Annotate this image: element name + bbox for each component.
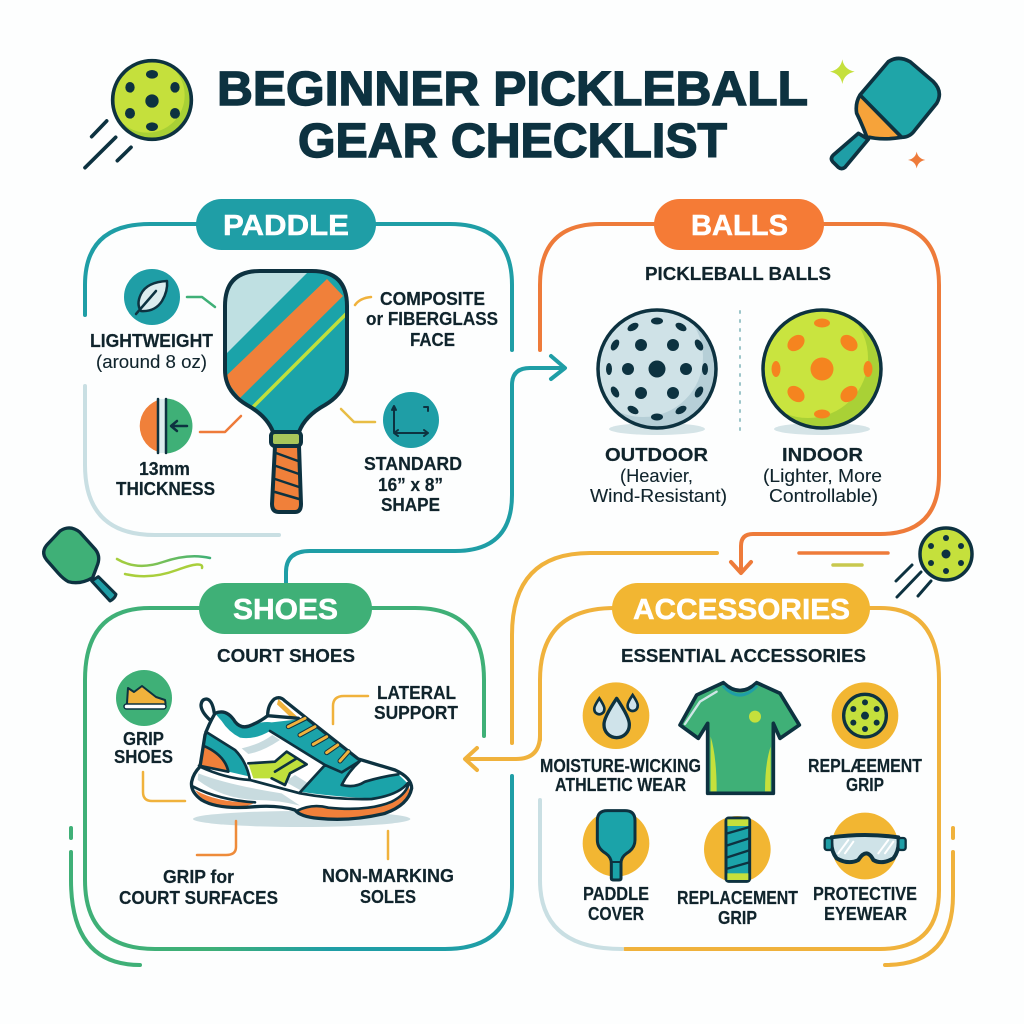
icon: header paddle bbox=[830, 58, 939, 169]
label: indoor: INDOOR bbox=[782, 445, 863, 465]
label: protective eyewear bbox=[813, 884, 917, 924]
heading pill: balls: BALLS bbox=[691, 210, 788, 242]
label: protective eyewear: EYEWEAR bbox=[824, 904, 907, 924]
arrow: accessories to shoes bbox=[465, 553, 717, 770]
label: paddle cover bbox=[583, 884, 649, 924]
icon: grip shoe bbox=[116, 670, 172, 726]
heading pill: accessories bbox=[612, 583, 870, 634]
label: thickness bbox=[116, 459, 215, 499]
label: replacement grip: REPLÆEMENT bbox=[808, 756, 922, 776]
title: GEAR CHECKLIST bbox=[298, 115, 727, 168]
divider bbox=[739, 311, 741, 433]
label: moisture-wicking athletic wear: MOISTURE-WICKING bbox=[540, 756, 701, 776]
heading pill: paddle: PADDLE bbox=[223, 210, 349, 242]
label: composite face: COMPOSITE bbox=[380, 289, 485, 309]
panel: paddle bbox=[85, 199, 512, 535]
connector: shape bbox=[341, 409, 375, 422]
label: grip for court surfaces: GRIP for bbox=[163, 867, 234, 887]
icon: paddle cover bbox=[583, 810, 649, 880]
label: paddle cover: PADDLE bbox=[583, 884, 649, 904]
label: grip shoes: GRIP bbox=[123, 729, 164, 749]
label: replacement grip tape: REPLACEMENT bbox=[677, 888, 798, 908]
connector: non-marking bbox=[387, 831, 389, 859]
connector: composite bbox=[355, 297, 371, 305]
label: composite face: or FIBERGLASS bbox=[366, 309, 498, 329]
label: non-marking soles: SOLES bbox=[360, 887, 416, 907]
label: lightweight bbox=[90, 331, 213, 372]
subheading: court shoes: COURT SHOES bbox=[217, 646, 355, 666]
label: shape: 16” x 8” bbox=[378, 475, 443, 495]
label: protective eyewear: PROTECTIVE bbox=[813, 884, 917, 904]
heading pill: shoes bbox=[199, 583, 372, 634]
label: composite face: FACE bbox=[410, 330, 455, 350]
label: non-marking soles: NON-MARKING bbox=[322, 866, 454, 886]
outdoor ball bbox=[596, 308, 718, 435]
label: indoor: (Lighter, More bbox=[763, 466, 882, 486]
label: outdoor: Wind-Resistant) bbox=[590, 486, 727, 506]
indoor ball bbox=[761, 308, 883, 435]
label: indoor bbox=[763, 445, 882, 506]
paddle illustration bbox=[222, 268, 347, 512]
arrow: paddle to balls and shoes bbox=[286, 356, 565, 583]
label: shape: STANDARD bbox=[364, 454, 462, 474]
subheading: pickleball balls: PICKLEBALL BALLS bbox=[645, 264, 831, 284]
label: paddle cover: COVER bbox=[588, 904, 644, 924]
label: grip shoes bbox=[114, 729, 173, 767]
heading pill: accessories: ACCESSORIES bbox=[633, 594, 850, 626]
label: grip for court surfaces: COURT SURFACES bbox=[119, 888, 278, 908]
label: moisture-wicking athletic wear bbox=[540, 756, 701, 795]
label: non-marking soles bbox=[322, 866, 454, 907]
connector: grip shoes bbox=[143, 772, 185, 801]
label: replacement grip tape bbox=[677, 888, 798, 928]
label: lightweight: LIGHTWEIGHT bbox=[90, 331, 213, 351]
icon: protective eyewear bbox=[825, 813, 906, 879]
label: outdoor bbox=[590, 445, 727, 506]
label: lateral support: LATERAL bbox=[377, 683, 456, 703]
label: shape: SHAPE bbox=[381, 495, 440, 515]
decoration: green paddle and waves bbox=[44, 528, 210, 601]
heading pill: shoes: SHOES bbox=[233, 594, 338, 626]
label: thickness: THICKNESS bbox=[116, 479, 215, 499]
label: replacement grip: GRIP bbox=[846, 775, 884, 795]
icon: moisture drops bbox=[583, 682, 649, 749]
label: indoor: Controllable) bbox=[769, 486, 878, 506]
label: composite face bbox=[366, 289, 498, 350]
connector: lightweight bbox=[187, 297, 215, 307]
icon: shape bbox=[383, 392, 439, 448]
label: thickness: 13mm bbox=[139, 459, 190, 479]
icon: header pickleball bbox=[85, 58, 191, 168]
icon: replacement grip ball bbox=[832, 682, 898, 749]
connector: grip for court surfaces bbox=[197, 821, 236, 855]
icon: lightweight feather bbox=[124, 269, 180, 325]
decoration: flying ball bbox=[799, 528, 972, 597]
label: replacement grip bbox=[808, 756, 922, 795]
label: grip for court surfaces bbox=[119, 867, 278, 908]
label: outdoor: (Heavier, bbox=[620, 466, 693, 486]
label: grip shoes: SHOES bbox=[114, 747, 173, 767]
label: lateral support bbox=[374, 683, 458, 723]
panel: balls bbox=[540, 199, 939, 573]
label: moisture-wicking athletic wear: ATHLETIC WEAR bbox=[555, 775, 686, 795]
title: BEGINNER PICKLEBALL bbox=[217, 63, 808, 116]
title bbox=[217, 63, 808, 168]
panel: accessories bbox=[540, 583, 953, 965]
heading pill: paddle bbox=[196, 199, 376, 250]
label: shape bbox=[364, 454, 462, 515]
icon: thickness bbox=[140, 398, 192, 454]
panel: shoes bbox=[71, 583, 512, 965]
connector: thickness bbox=[200, 416, 241, 432]
label: outdoor: OUTDOOR bbox=[605, 445, 708, 465]
icon: grip tape bbox=[704, 816, 771, 883]
subheading: essential accessories: ESSENTIAL ACCESSORIES bbox=[621, 646, 866, 666]
icon: shirt bbox=[680, 683, 799, 793]
heading pill: balls bbox=[654, 199, 824, 250]
label: replacement grip tape: GRIP bbox=[718, 908, 757, 928]
shoe illustration bbox=[191, 698, 412, 827]
arrow: balls to accessories bbox=[731, 562, 751, 573]
connector: lateral support bbox=[333, 696, 368, 724]
label: lateral support: SUPPORT bbox=[374, 703, 458, 723]
label: lightweight: (around 8 oz) bbox=[96, 352, 207, 372]
